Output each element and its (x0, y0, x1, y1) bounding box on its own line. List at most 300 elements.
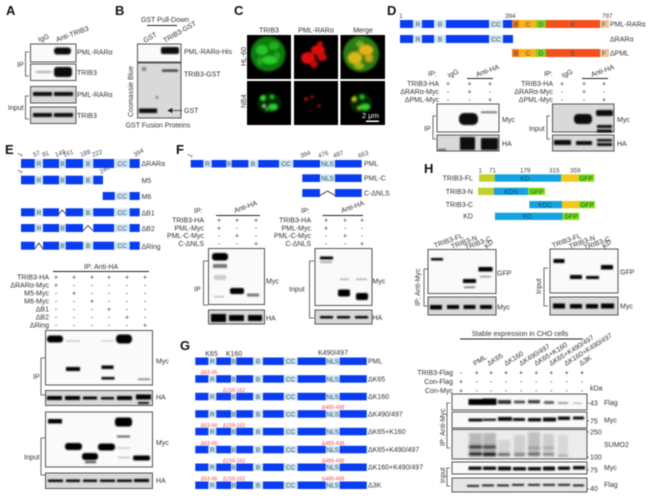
condition table E: ΔRARα-Myc (10, 282, 49, 290)
HL-60 green cell (250, 36, 286, 72)
construct TRIB3-N: KDN (504, 189, 518, 196)
construct ΔK65 (195, 370, 385, 383)
condition table E: - (55, 306, 58, 314)
blot labels I: Myc (604, 465, 617, 472)
condition table I: + (580, 370, 584, 377)
panel C: confocal microscopy (234, 3, 385, 125)
condition table E: - (73, 314, 76, 322)
blot boxes (30, 44, 76, 124)
condition table I: - (505, 388, 508, 395)
residue numbers E: 57 (32, 150, 42, 159)
condition table I: - (566, 388, 569, 395)
left condition table: IgG (447, 69, 460, 80)
condition table E: - (55, 314, 58, 322)
lane labels I: ΔK490/497 (518, 343, 552, 368)
construct ΔRARα: ΔRARα (142, 161, 165, 168)
construct Δ3K: Δ3K (368, 483, 382, 490)
condition table E: - (108, 298, 111, 306)
construct ΔRing: B (86, 243, 90, 250)
lane labels I: ΔK65+K160 (533, 342, 569, 368)
construct ΔB2: ΔB2 (142, 226, 155, 233)
construct ΔK65+K160: Δ63-66 (201, 423, 217, 429)
condition table E: - (126, 298, 129, 306)
ΔRARα construct: B (438, 36, 442, 44)
residue numbers E: 189 (79, 149, 92, 159)
blot boxes H (428, 249, 618, 315)
construct Δ3K: CC (286, 483, 295, 490)
left condition table: Anti-HA (475, 64, 501, 79)
construct PML row (195, 358, 382, 366)
bands I: input Myc (468, 466, 585, 470)
condition table I (417, 370, 603, 395)
blot labels H: Myc (620, 304, 633, 310)
construct Δ3K: B (232, 483, 236, 490)
panel letter E: E (5, 142, 14, 157)
right condition table: IgG (561, 69, 574, 80)
blot boxes D (437, 104, 614, 151)
left condition table F: PML-C-Myc (167, 233, 204, 240)
bands I: Flag IP (468, 398, 582, 405)
bands I: input Flag (467, 484, 584, 487)
construct ΔK490/497: B (232, 411, 236, 418)
lysine labels: K65 (205, 351, 218, 358)
blot labels: PML-RARα (77, 50, 113, 56)
construct ΔK65: NLS (326, 376, 340, 383)
condition table E: - (73, 306, 76, 314)
construct ΔK65+K490/497: ΔK65+K490/497 (368, 447, 419, 454)
residue numbers: 797 (602, 13, 613, 20)
condition table E: + (125, 274, 129, 282)
construct ΔB2: R (37, 226, 42, 232)
construct M6 (103, 192, 151, 201)
PML-RARα construct (400, 20, 646, 28)
condition table E: + (90, 298, 94, 306)
residue numbers F: 476 (317, 150, 330, 160)
blot labels F: HA (372, 315, 383, 322)
construct ΔK160+K490/497: B (232, 465, 236, 472)
blot labels: IP (17, 62, 24, 69)
construct ΔK160+K490/497: R (210, 465, 215, 472)
right condition table: + (602, 81, 606, 88)
construct ΔRARα: CC (117, 161, 127, 168)
construct M5 (21, 176, 151, 185)
condition table E: - (126, 290, 129, 298)
left condition table F: - (255, 226, 258, 232)
construct KD: KD (522, 214, 532, 220)
right condition table F: + (360, 241, 364, 248)
construct ΔK65: R (210, 376, 215, 383)
construct PML: NLS (321, 161, 334, 168)
blot labels F: Myc (372, 278, 386, 286)
construct PML row: R (210, 359, 215, 366)
residue numbers F: 394 (299, 150, 312, 160)
molecular weight markers: 250 (590, 430, 602, 436)
bands I: SUMO2 smear (469, 432, 568, 457)
condition table E: + (54, 282, 58, 290)
NB4 merge cell (350, 93, 372, 113)
construct ΔRing: CC (117, 243, 127, 250)
condition table E: - (108, 314, 111, 322)
right condition table F: + (343, 233, 347, 240)
construct ΔB1: CC (117, 210, 127, 217)
right condition table F: + (360, 218, 364, 224)
residue numbers E: 1 (17, 151, 25, 158)
construct ΔK65: Δ63-66 (201, 370, 217, 376)
construct M6: M6 (142, 194, 151, 201)
lane labels right: TRIB3-C (583, 236, 611, 252)
lane labels left: TRIB3-C (464, 236, 492, 252)
construct Δ3K: B (256, 483, 260, 490)
condition table E: - (144, 298, 147, 306)
right condition table: Anti-HA (590, 64, 616, 79)
blot labels D: Myc (617, 117, 630, 124)
blot and gel boxes (138, 44, 181, 118)
condition table E (10, 264, 149, 330)
lane labels I: PML (472, 354, 488, 368)
construct TRIB3-N: GFP (530, 189, 543, 196)
blot boxes I (452, 394, 587, 492)
blot labels: Input (8, 105, 24, 112)
lane labels B (142, 20, 198, 45)
panel D: PML-RARα domain maps and blots (387, 3, 646, 151)
construct ΔK65+K490/497: B (256, 447, 260, 454)
condition table E: ΔRing (30, 322, 49, 330)
condition table I: - (476, 388, 479, 395)
construct PML row: CC (286, 359, 295, 366)
condition table E: - (55, 290, 58, 298)
residue numbers H: 71 (489, 168, 497, 174)
blot labels H: IP: Anti-Myc (415, 268, 422, 306)
blot labels D: IP (424, 126, 431, 133)
residue numbers H: 179 (520, 168, 531, 174)
left condition table: + (467, 81, 472, 88)
left condition table F: - (218, 241, 221, 248)
construct ΔK65+K160: CC (286, 429, 295, 436)
lane labels: Anti-TRIB3 (55, 26, 90, 44)
molecular weight markers: 100 (590, 454, 602, 462)
channel headings (241, 28, 373, 108)
scale bar: 2 μm (362, 111, 379, 120)
construct ΔB1: B (86, 210, 90, 217)
brackets H (424, 268, 548, 306)
left condition table F: - (236, 241, 239, 248)
brackets F (204, 261, 314, 318)
PML-RARα construct: E (571, 22, 576, 28)
construct ΔK160 (195, 388, 389, 401)
brackets D (433, 116, 550, 139)
right condition table: + (602, 97, 606, 104)
lane labels I: ΔK65+K490/497 (548, 335, 596, 368)
condition table E: + (143, 274, 147, 282)
condition table I: + (519, 370, 523, 377)
construct ΔK65+K160: Δ159-162 (223, 423, 245, 429)
channel headings: Merge (353, 28, 373, 34)
construct ΔK160+K490/497: NLS (326, 465, 340, 472)
residue numbers H: 315 (549, 168, 560, 174)
right condition table: - (603, 89, 606, 96)
channel headings: PML-RARα (298, 28, 334, 34)
condition table E: - (144, 282, 147, 290)
condition table I: + (475, 370, 479, 377)
condition table E: M5-Myc (24, 290, 49, 298)
blot labels I (440, 400, 629, 489)
condition table E: ΔB1 (36, 306, 49, 314)
bands D (438, 110, 613, 150)
right condition table F: - (325, 233, 328, 240)
residue numbers F (187, 150, 370, 160)
channel headings: TRIB3 (259, 28, 279, 34)
molecular weight markers: 43 (590, 400, 598, 408)
construct ΔK160+K490/497: ΔK160+K490/497 (368, 465, 423, 472)
lysine labels: K160 (226, 351, 242, 358)
right condition table F: - (344, 241, 347, 248)
left condition table: + (488, 97, 492, 104)
residue numbers E (17, 147, 146, 176)
construct C-ΔNLS (302, 189, 390, 198)
left condition table F: C-ΔNLS (178, 241, 204, 248)
construct ΔK65+K490/497: NLS (326, 447, 340, 454)
labels B: GST (184, 108, 199, 115)
condition table I: + (534, 370, 538, 377)
blot labels E: Myc (156, 440, 169, 447)
condition table E: - (144, 290, 147, 298)
construct PML: R (205, 161, 210, 168)
construct TRIB3-C (446, 201, 595, 209)
residue numbers E: 1 (17, 168, 25, 175)
condition table E: + (72, 290, 76, 298)
condition table I: - (520, 379, 523, 386)
construct Δ3K: R (210, 483, 215, 490)
construct ΔB2: CC (117, 226, 127, 232)
blot labels F (194, 278, 386, 322)
lane labels I: ΔK160 (503, 351, 525, 368)
PML-RARα construct: B (438, 22, 442, 28)
left condition table F: + (217, 218, 221, 224)
right condition table F: C-ΔNLS (285, 241, 311, 248)
left condition table: - (489, 89, 492, 96)
blot labels H: Myc (497, 304, 510, 312)
panel letter C: C (234, 3, 244, 18)
condition table E: + (125, 314, 129, 322)
ΔRARα construct: CC (491, 36, 501, 44)
blot labels E (24, 358, 169, 485)
left condition table F (167, 200, 260, 248)
lane labels left: KD (483, 239, 495, 250)
residue numbers E: 240 (98, 164, 112, 176)
construct ΔK160: Δ159-162 (223, 388, 245, 394)
condition table E: - (55, 298, 58, 306)
condition table I: + (459, 388, 463, 395)
brackets I (447, 403, 450, 486)
construct Δ3K: NLS (326, 483, 340, 490)
right condition table F: Anti-HA (340, 200, 366, 215)
condition table E: - (126, 282, 129, 290)
left condition table F: Anti-HA (233, 200, 259, 215)
right condition table: ΔPML-Myc (519, 97, 553, 104)
condition table I: - (581, 388, 584, 395)
condition table E: + (72, 274, 76, 282)
labels B: TRIB3-GST (184, 72, 221, 78)
blot labels F: Input (289, 286, 305, 294)
construct ΔK160: B (232, 394, 236, 401)
construct ΔK65+K490/497: R (210, 447, 215, 454)
construct M5: R (37, 178, 42, 184)
blot labels: TRIB3 (77, 70, 97, 77)
residue numbers: 1 (399, 13, 403, 20)
blot labels E: Input (24, 454, 40, 462)
blot labels I: Flag (604, 482, 618, 489)
lane labels B: TRIB3-GST (162, 20, 198, 45)
right condition table F: + (324, 226, 328, 232)
blot labels I: Input (440, 467, 447, 483)
construct C-ΔNLS: C-ΔNLS (364, 190, 390, 198)
condition table I: + (489, 370, 493, 377)
construct ΔK65+K490/497: B (232, 447, 236, 454)
condition table E: - (73, 298, 76, 306)
bands F (211, 253, 368, 322)
right condition table F: TRIB3-HA (279, 218, 311, 224)
panel B: GST pull-down (115, 3, 232, 130)
construct PML: B (227, 161, 231, 168)
construct PML (191, 160, 378, 168)
right condition table: + (560, 81, 564, 88)
left condition table: - (447, 97, 450, 104)
blot labels E: Myc (156, 358, 169, 366)
brackets (26, 52, 29, 119)
lane labels (37, 26, 90, 44)
condition table I: - (535, 388, 538, 395)
construct ΔK160: CC (286, 394, 295, 401)
condition table E: - (55, 322, 58, 330)
right condition table F: - (361, 226, 364, 232)
condition table I: + (504, 370, 508, 377)
blot labels D (424, 117, 630, 148)
residue numbers E: 149 (54, 149, 67, 159)
construct ΔK490/497: CC (286, 411, 295, 418)
ΔPML construct: C (526, 50, 531, 58)
right condition table F: IP: (301, 208, 310, 215)
NB4 red spots (304, 96, 320, 111)
construct ΔK160: B (256, 394, 260, 401)
blot labels I: IP: Anti-Myc (440, 408, 447, 446)
construct M5: M5 (142, 178, 151, 185)
construct PML row: NLS (326, 359, 340, 366)
ΔPML construct (512, 49, 629, 58)
construct M5: B (60, 178, 65, 184)
left condition table F: - (255, 233, 258, 240)
construct ΔK65+K160: B (232, 429, 236, 436)
left condition table: - (468, 97, 471, 104)
construct PML-C: NLS (321, 176, 334, 182)
condition table I: - (581, 379, 584, 386)
blot labels F: Myc (266, 278, 279, 286)
condition table E: TRIB3-HA (17, 274, 49, 282)
construct ΔK65+K490/497: CC (286, 447, 295, 454)
condition table E: ΔB2 (36, 314, 49, 322)
condition table E: - (108, 322, 111, 330)
construct ΔB1: R (37, 210, 42, 217)
blot labels: PML-RARα (77, 92, 113, 99)
panel E: RARα deletion mapping (5, 142, 169, 488)
construct TRIB3-N: TRIB3-N (446, 189, 473, 196)
PML-RARα construct: C (526, 22, 531, 28)
bands E (47, 334, 151, 482)
construct TRIB3-FL: TRIB3-FL (443, 176, 473, 182)
ΔRARα construct: ΔRARα (610, 36, 634, 44)
blot labels I: Myc (604, 418, 617, 424)
pull-down header: GST Pull-Down (141, 17, 189, 24)
lane labels B: GST (142, 31, 159, 45)
right condition table F: - (325, 241, 328, 248)
construct PML row: B (256, 359, 260, 366)
labels B (126, 49, 232, 130)
left condition table F: - (236, 226, 239, 232)
residue numbers H: 1 (478, 168, 482, 174)
condition table I: TRIB3-Flag (417, 370, 453, 377)
right condition table F (274, 200, 366, 248)
ΔRARα construct: R (416, 36, 421, 44)
left condition table F: PML-Myc (174, 226, 204, 232)
blot labels I: SUMO2 (604, 442, 629, 449)
left condition table F: + (235, 233, 239, 240)
condition table E: - (91, 322, 94, 330)
construct ΔK490/497: NLS (326, 411, 340, 418)
construct M6: CC (117, 194, 127, 200)
blot labels E: IP (33, 374, 40, 381)
condition table I: - (476, 379, 479, 386)
blot labels (8, 50, 113, 120)
left condition table F: + (254, 218, 258, 224)
construct TRIB3-C: TRIB3-C (446, 202, 473, 209)
construct ΔK490/497: ΔK490/497 (368, 411, 403, 418)
molecular weight markers (587, 400, 602, 493)
condition table E: IP: Anti-HA (84, 264, 118, 271)
ΔPML construct: B (514, 50, 518, 58)
lane labels I: ΔK160+K490/497 (563, 333, 614, 368)
blot labels F: IP (194, 286, 201, 294)
blot labels D: HA (502, 141, 512, 148)
condition table I: - (566, 379, 569, 386)
construct ΔK65+K160: ΔK65+K160 (368, 429, 406, 436)
blot labels E: HA (156, 478, 166, 485)
construct ΔK160+K490/497: Δ489-498 (322, 458, 344, 464)
left condition table F: IP: (194, 208, 203, 215)
blot labels E: HA (156, 394, 166, 402)
molecular weight markers: 40 (590, 486, 598, 493)
condition table I: - (535, 379, 538, 386)
construct ΔK160: R (210, 394, 215, 401)
right condition table: - (583, 97, 586, 104)
condition table E: + (143, 322, 147, 330)
condition table E: + (107, 274, 111, 282)
PML-RARα construct: PML-RARα (610, 22, 646, 28)
lane labels right: TRIB3-FL (551, 233, 582, 250)
construct M5: B (86, 178, 90, 184)
condition table I: Con-Myc (425, 388, 453, 395)
construct PML: CC (281, 161, 291, 168)
condition table E: - (126, 322, 129, 330)
condition table I: - (460, 370, 463, 377)
left condition table (400, 64, 501, 104)
bands H (430, 258, 614, 310)
condition table I: + (549, 370, 553, 377)
construct Δ3K: Δ159-162 (223, 476, 245, 482)
construct ΔK490/497: Δ489-498 (322, 405, 344, 411)
lysine labels: K490/497 (318, 350, 348, 357)
condition table I: + (565, 370, 569, 377)
right condition table F: - (344, 226, 347, 232)
left condition table F: - (218, 233, 221, 240)
